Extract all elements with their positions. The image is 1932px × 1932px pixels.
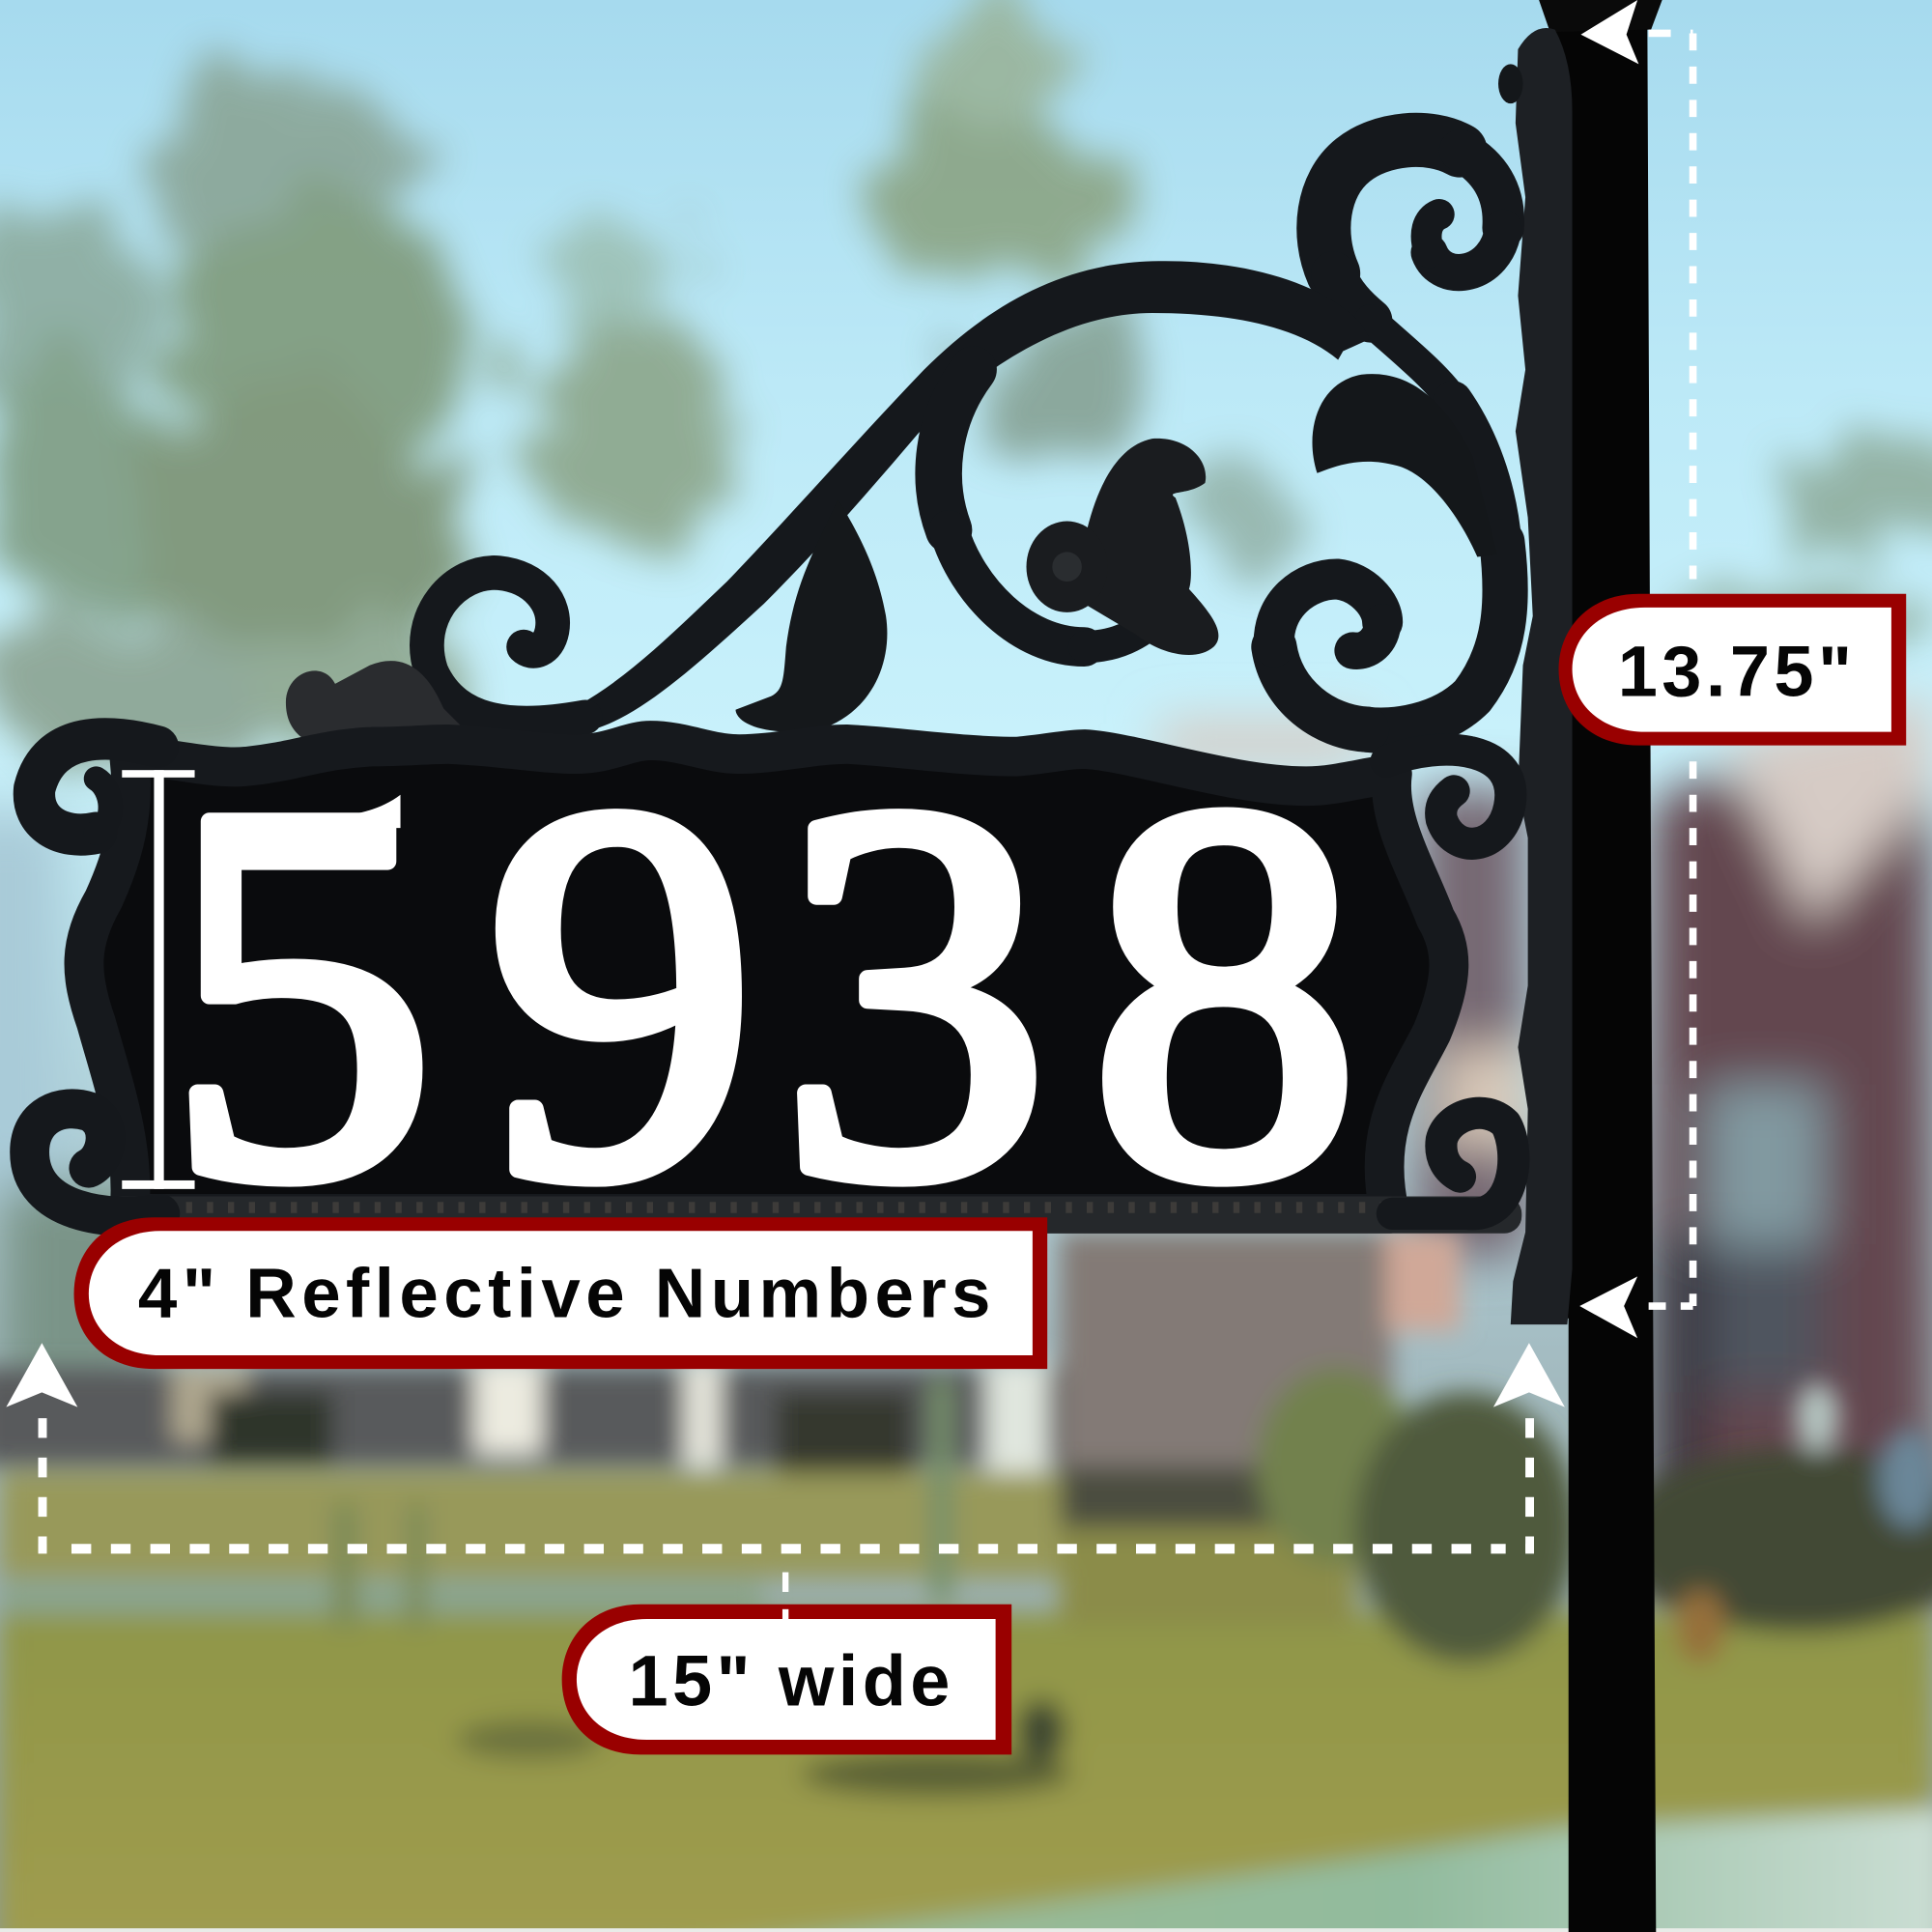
label: 4 inch reflective numbers: [74, 1217, 1047, 1369]
main arc: [579, 261, 1370, 729]
left bud: [286, 661, 462, 742]
number plate: [30, 695, 1521, 1290]
arrow: left edge of width: [6, 1343, 77, 1407]
arrow: bottom of bracket: [1579, 1276, 1637, 1338]
label: 13.75 inches: [1559, 594, 1906, 746]
bolt: [1498, 64, 1523, 103]
flag on the digit 5: [296, 795, 401, 828]
arrow: top of bracket: [1580, 0, 1638, 64]
upper leaf: [1312, 374, 1497, 557]
left spiral: [427, 573, 585, 724]
plate frame: [84, 741, 1449, 1213]
number height marker: [122, 770, 195, 1189]
top spiral: [1323, 140, 1503, 273]
corner scroll bottom left: [30, 1109, 160, 1216]
middle leaf: [735, 499, 887, 732]
corner scroll top left: [34, 739, 157, 835]
rail texture: [124, 1204, 1509, 1211]
mounting strip: [1511, 28, 1573, 1324]
bottom rail: [104, 1197, 1521, 1234]
arrow: right edge of width: [1493, 1343, 1565, 1407]
house numbers: 5938: [166, 695, 1359, 1290]
height dashed line: [1649, 33, 1693, 1306]
flower ornament: [1026, 439, 1218, 655]
post: [1539, 0, 1662, 1932]
label: 4 inch reflective numbers: 4" Reflective Numbers: [138, 1255, 991, 1333]
label: 15 inches wide: [562, 1605, 1011, 1754]
wrought iron bracket: [286, 28, 1573, 1324]
width dashed line: [39, 1418, 1534, 1592]
inner spiral: [939, 370, 1158, 647]
corner scroll bottom right: [1392, 1113, 1514, 1214]
corner scroll top right: [1386, 750, 1511, 843]
long stem and lower spiral: [1274, 273, 1505, 730]
label: 15 inches wide: 15" wide: [629, 1640, 950, 1720]
label: 13.75 inches: 13.75": [1618, 632, 1852, 712]
